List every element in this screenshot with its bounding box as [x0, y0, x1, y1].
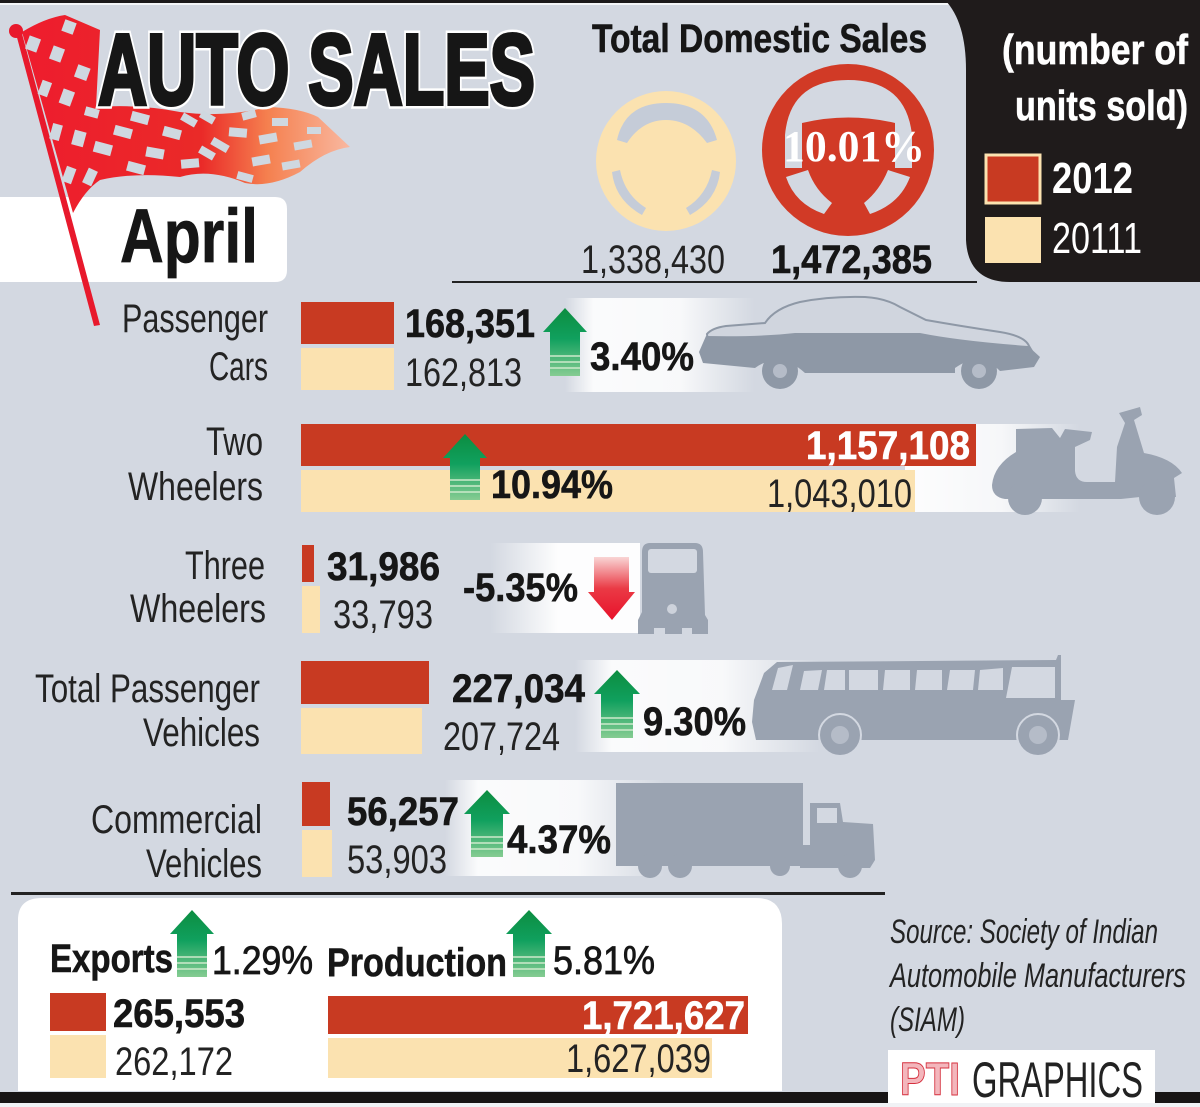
- label: [91, 798, 262, 886]
- values: [327, 545, 440, 637]
- values: [443, 667, 586, 759]
- label: Passenger: [122, 297, 268, 341]
- exports change: 1.29%: [212, 939, 313, 983]
- row: two wheelers: [128, 407, 1182, 516]
- legend swatch 2012: [986, 154, 1133, 203]
- values: 227,034: [452, 667, 586, 711]
- legend panel: [945, 0, 1200, 282]
- panel: exports and production: [18, 898, 782, 1091]
- legend heading: [1002, 26, 1189, 129]
- label: Commercial: [91, 798, 262, 842]
- production change: 5.81%: [553, 939, 655, 983]
- values: 162,813: [405, 351, 522, 395]
- exports values: 265,553: [113, 992, 245, 1036]
- label: [128, 420, 263, 509]
- production heading: Production: [327, 941, 507, 985]
- icon: bus: [752, 655, 1075, 756]
- arrow up: [443, 434, 487, 500]
- exports heading: Exports: [50, 937, 173, 981]
- heading: total domestic sales: Total Domestic Sales: [592, 17, 927, 61]
- bars: [301, 424, 976, 512]
- row: passenger cars: [122, 297, 1040, 395]
- values: 207,724: [443, 715, 560, 759]
- month label: April: April: [120, 194, 258, 279]
- bars: [301, 661, 429, 754]
- production bars: [328, 996, 748, 1078]
- values: [347, 790, 459, 882]
- values: 33,793: [333, 593, 433, 637]
- bars: [302, 545, 320, 633]
- arrow up: [170, 910, 214, 977]
- label: Three: [185, 544, 265, 588]
- label: [122, 297, 268, 389]
- month box: [0, 197, 287, 282]
- values: 31,986: [327, 545, 440, 589]
- values: 168,351: [405, 302, 535, 346]
- production values: 1,721,627: [582, 994, 745, 1038]
- values: 1,157,108: [806, 424, 970, 468]
- title: AUTO SALES: [98, 14, 535, 126]
- legend swatch 2011: 20111: [1052, 214, 1142, 263]
- label: Wheelers: [130, 587, 266, 631]
- bars: [301, 302, 394, 390]
- source note: [889, 913, 1186, 1039]
- change: 3.40%: [590, 335, 694, 379]
- change: -5.35%: [463, 566, 578, 610]
- credit: PTI graphics: [888, 1050, 1155, 1107]
- values: 1,043,010: [767, 472, 912, 516]
- change: 10.94%: [491, 463, 613, 507]
- arrow up: [594, 670, 640, 738]
- exports values: 262,172: [115, 1040, 233, 1084]
- bars: [302, 782, 332, 877]
- source note: (SIAM): [890, 1001, 965, 1039]
- change: 4.37%: [507, 818, 611, 862]
- label: Vehicles: [143, 711, 260, 755]
- production values: 1,627,039: [566, 1037, 711, 1081]
- arrow up: [464, 790, 510, 857]
- arrow down: [588, 557, 635, 620]
- values: 56,257: [347, 790, 459, 834]
- arrow up: [543, 308, 587, 376]
- credit: PTI graphics: PTI: [900, 1053, 960, 1105]
- values: [405, 302, 535, 395]
- values: [767, 424, 970, 516]
- title: [98, 14, 535, 126]
- change: 9.30%: [643, 700, 746, 744]
- legend swatch 2011: [985, 214, 1142, 263]
- icon: steering wheel 2012: [762, 64, 934, 236]
- label: [130, 544, 266, 631]
- title: AUTO SALES: [98, 14, 535, 126]
- icon: scooter: [992, 407, 1182, 515]
- icon: steering wheel 2011: [596, 91, 736, 231]
- value 2011 total: 1,338,430: [581, 238, 725, 282]
- exports bars: [50, 993, 106, 1078]
- label: Wheelers: [128, 465, 263, 509]
- icon: car: [699, 297, 1040, 389]
- icon: truck: [616, 783, 875, 878]
- value 2012 total: 1,472,385: [771, 238, 932, 282]
- bottom black rule: [0, 1092, 1200, 1103]
- exports values: [113, 992, 245, 1084]
- values: 53,903: [347, 838, 447, 882]
- arrow up: [506, 910, 552, 977]
- row: three wheelers: [130, 543, 708, 637]
- label: Two: [206, 420, 263, 464]
- icon: checkered flag: [9, 15, 350, 326]
- label: Cars: [209, 345, 268, 389]
- row: commercial vehicles: [91, 780, 875, 886]
- legend swatch 2012: 2012: [1052, 154, 1133, 203]
- label: Total Passenger: [35, 667, 260, 711]
- row: total passenger vehicles: [35, 655, 1075, 759]
- label: Vehicles: [146, 842, 262, 886]
- icon: auto rickshaw: [638, 543, 708, 634]
- production values: [566, 994, 745, 1081]
- label: [35, 667, 260, 755]
- percentage in wheel: 10.01%: [783, 122, 925, 171]
